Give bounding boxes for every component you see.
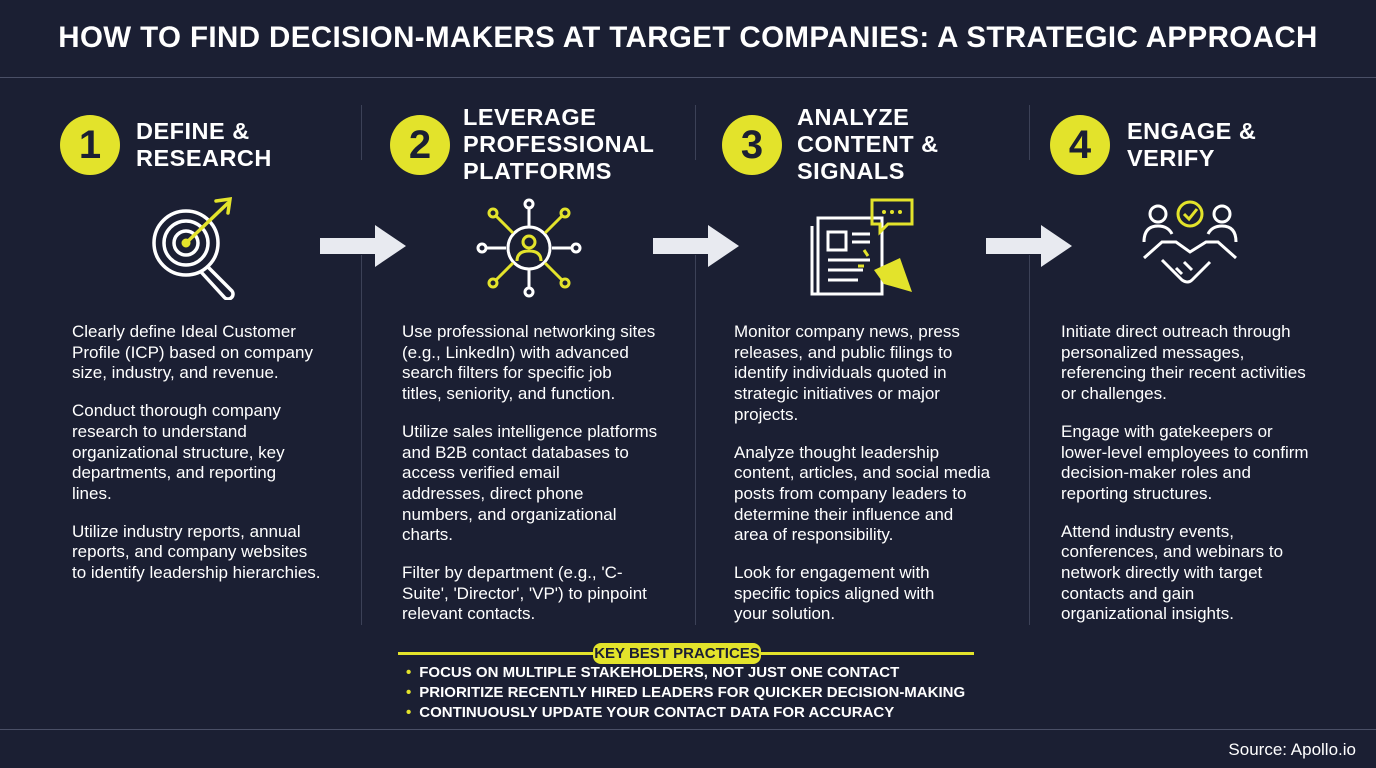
text column 3: Monitor company news, press — [734, 322, 960, 341]
step 3 heading: CONTENT & — [797, 131, 939, 157]
step 4 number: 4 — [1069, 123, 1091, 167]
text column 2: charts. — [402, 525, 453, 544]
text column 3: identify individuals quoted in — [734, 363, 947, 382]
text column 3 — [734, 322, 990, 623]
text column 4: Attend industry events, — [1061, 522, 1234, 541]
text column 1: to identify leadership hierarchies. — [72, 563, 321, 582]
step 3 heading: SIGNALS — [797, 158, 905, 184]
text column 3: strategic initiatives or major — [734, 384, 940, 403]
text column 1: Utilize industry reports, annual — [72, 522, 301, 541]
step 3 heading: ANALYZE — [797, 104, 909, 130]
text column 4: decision-maker roles and — [1061, 463, 1251, 482]
step 4 heading — [1127, 118, 1256, 171]
text column 1: Conduct thorough company — [72, 401, 281, 420]
text column 4 — [1061, 322, 1309, 623]
step 4 heading: ENGAGE & — [1127, 118, 1256, 144]
text column 2: (e.g., LinkedIn) with advanced — [402, 343, 629, 362]
text column 4: or challenges. — [1061, 384, 1167, 403]
step 2 heading: LEVERAGE — [463, 104, 596, 130]
text column 2: relevant contacts. — [402, 604, 535, 623]
text column 3: area of responsibility. — [734, 525, 893, 544]
text column 2: and B2B contact databases to — [402, 443, 629, 462]
step 1 number — [60, 115, 120, 175]
text column 3: your solution. — [734, 604, 835, 623]
text column 1: Profile (ICP) based on company — [72, 343, 313, 362]
text column 1 — [72, 322, 321, 582]
text column 2: search filters for specific job — [402, 363, 612, 382]
text column 1: research to understand — [72, 422, 247, 441]
step 2 number — [390, 115, 450, 175]
text column 4: Initiate direct outreach through — [1061, 322, 1291, 341]
text column 4: organizational insights. — [1061, 604, 1234, 623]
text column 1: size, industry, and revenue. — [72, 363, 279, 382]
step 3 number — [722, 115, 782, 175]
icon: newspaper with chat and megaphone — [810, 198, 914, 296]
text column 3: projects. — [734, 405, 798, 424]
text column 3: content, articles, and social media — [734, 463, 990, 482]
step 3 heading — [797, 104, 939, 184]
bullet list: • PRIORITIZE RECENTLY HIRED LEADERS FOR QUICKER DECISION-MAKING — [406, 684, 965, 701]
bullet list: • FOCUS ON MULTIPLE STAKEHOLDERS, NOT JUST ONE CONTACT — [406, 664, 899, 681]
text column 2: access verified email — [402, 463, 560, 482]
step 3 number: 3 — [741, 123, 763, 167]
text column 4: conferences, and webinars to — [1061, 542, 1283, 561]
step 2 heading — [463, 104, 654, 184]
arrow 3 — [986, 225, 1072, 267]
text column 4: referencing their recent activities — [1061, 363, 1306, 382]
arrow 2 — [653, 225, 739, 267]
step 4 heading: VERIFY — [1127, 145, 1215, 171]
text column 4: Engage with gatekeepers or — [1061, 422, 1273, 441]
text column 2: Use professional networking sites — [402, 322, 655, 341]
text column 2: Filter by department (e.g., 'C- — [402, 563, 623, 582]
text column 2: addresses, direct phone — [402, 484, 583, 503]
text column 4: reporting structures. — [1061, 484, 1212, 503]
step 4 number — [1050, 115, 1110, 175]
source: Source: Apollo.io — [1228, 740, 1356, 759]
step 2 heading: PLATFORMS — [463, 158, 612, 184]
text column 1: lines. — [72, 484, 112, 503]
text column 3: specific topics aligned with — [734, 584, 934, 603]
text column 4: personalized messages, — [1061, 343, 1244, 362]
text column 4: network directly with target — [1061, 563, 1262, 582]
icon: target with magnifier — [152, 197, 235, 300]
text column 1: reports, and company websites — [72, 542, 307, 561]
arrow 1 — [320, 225, 406, 267]
text column 1: organizational structure, key — [72, 443, 285, 462]
title: HOW TO FIND DECISION-MAKERS AT TARGET COMPANIES: A STRATEGIC APPROACH — [58, 21, 1318, 54]
text column 2: numbers, and organizational — [402, 505, 617, 524]
icon: network — [476, 198, 582, 298]
text column 3: Analyze thought leadership — [734, 443, 939, 462]
text column 3: determine their influence and — [734, 505, 953, 524]
text column 2: Suite', 'Director', 'VP') to pinpoint — [402, 584, 647, 603]
best practices label: KEY BEST PRACTICES — [594, 645, 760, 662]
step 1 heading — [136, 118, 272, 171]
step 2 number: 2 — [409, 123, 431, 167]
text column 2 — [402, 322, 657, 623]
step 1 heading: RESEARCH — [136, 145, 272, 171]
text column 2: Utilize sales intelligence platforms — [402, 422, 657, 441]
text column 3: posts from company leaders to — [734, 484, 966, 503]
text column 3: releases, and public filings to — [734, 343, 952, 362]
text column 4: lower-level employees to confirm — [1061, 443, 1309, 462]
bullet list — [406, 664, 965, 721]
text column 4: contacts and gain — [1061, 584, 1194, 603]
key best practices panel — [398, 643, 974, 721]
icon: handshake with people — [1142, 200, 1238, 284]
text column 2: titles, seniority, and function. — [402, 384, 615, 403]
step 1 number: 1 — [79, 123, 101, 167]
bullet list: • CONTINUOUSLY UPDATE YOUR CONTACT DATA FOR ACCURACY — [406, 704, 894, 721]
text column 3: Look for engagement with — [734, 563, 930, 582]
step 1 heading: DEFINE & — [136, 118, 250, 144]
text column 1: Clearly define Ideal Customer — [72, 322, 296, 341]
text column 1: departments, and reporting — [72, 463, 276, 482]
step 2 heading: PROFESSIONAL — [463, 131, 654, 157]
